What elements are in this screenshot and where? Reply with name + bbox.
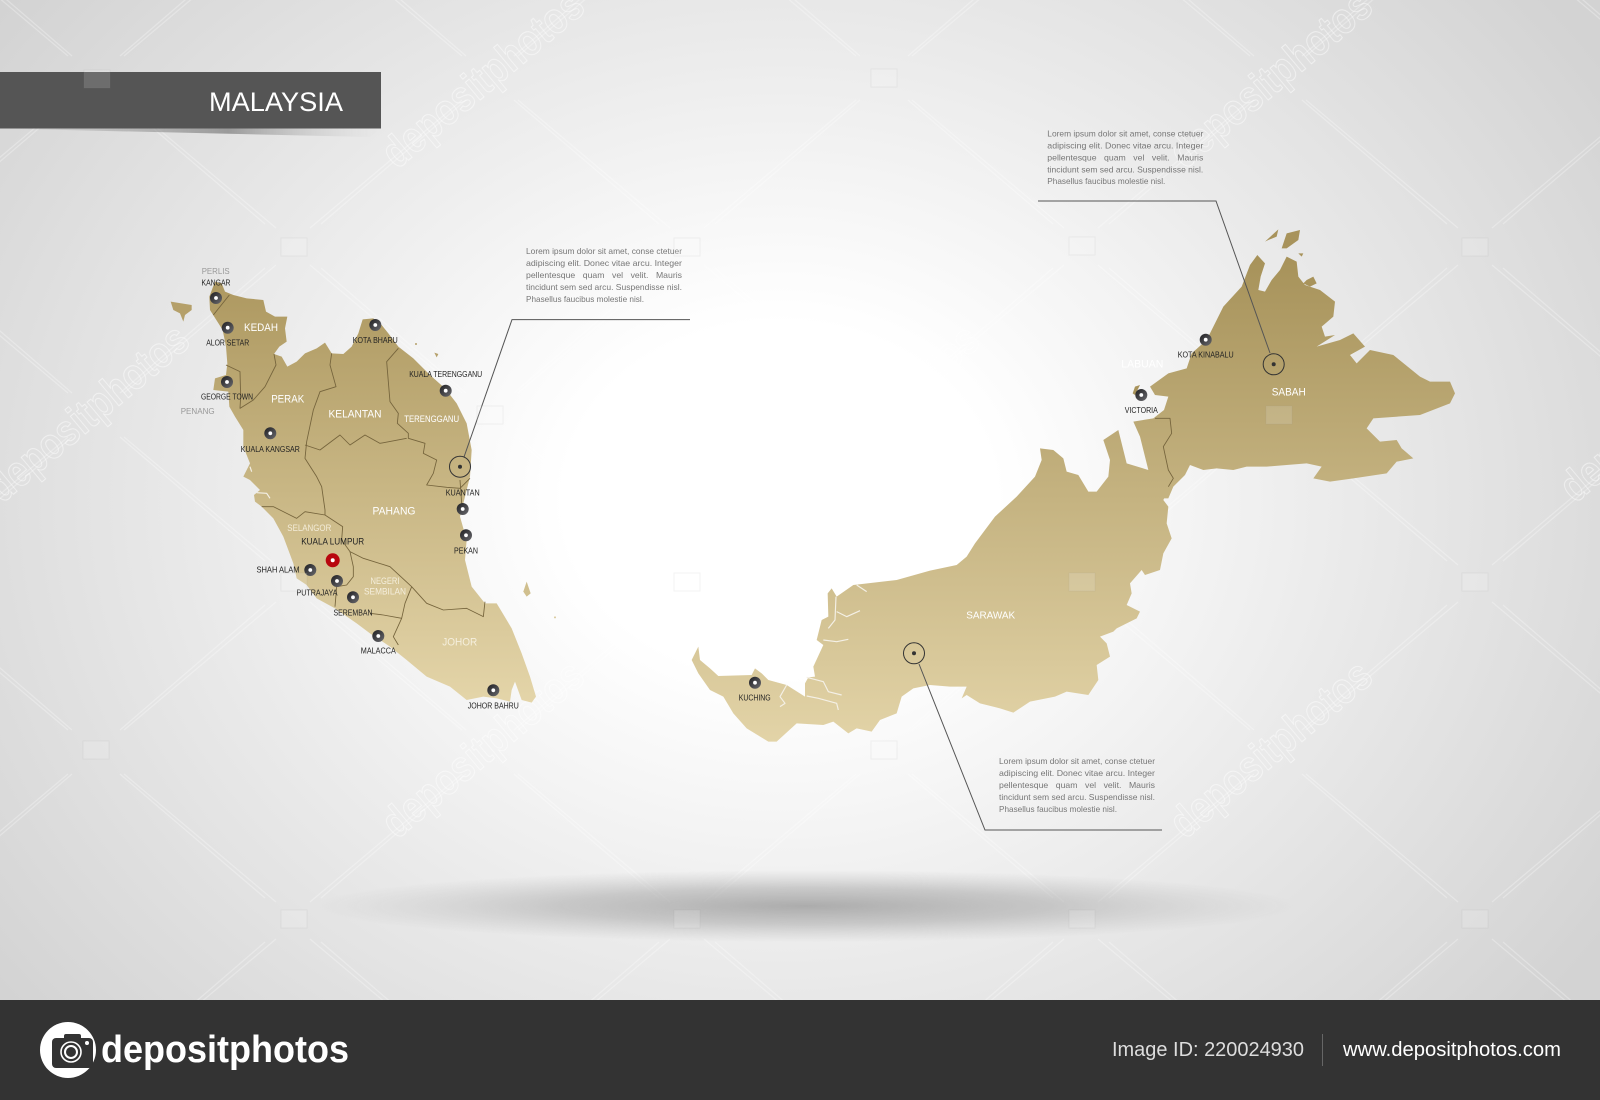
map: Sarawak (692, 430, 1173, 742)
callout: Sabah: pellentesque quam vel velit. Mauris (1047, 152, 1203, 162)
map: Sabah (1133, 229, 1455, 498)
state labels: peninsula: PERAK (271, 394, 305, 406)
islands (1133, 229, 1317, 395)
watermark camera marks (83, 69, 1488, 928)
callout: peninsula (450, 246, 690, 477)
city: Kuala Kangsar (241, 427, 300, 454)
city: Seremban (334, 591, 372, 617)
state labels: peninsula: KELANTAN (328, 408, 382, 420)
state labels: peninsula: NEGERI (370, 576, 400, 586)
image id: Image ID: 220024930 (1112, 1039, 1304, 1061)
state labels: peninsula: TERENGGANU (404, 414, 459, 425)
state labels: Borneo: LABUAN (1121, 358, 1163, 370)
callout: Sabah (1038, 129, 1284, 375)
city: Pekan: PEKAN (454, 545, 478, 555)
city: Alor Setar: ALOR SETAR (206, 338, 249, 348)
callout: Sabah: tincidunt sem sed arcu. Suspendisse nisl. (1047, 164, 1203, 174)
state labels: Borneo: SARAWAK (966, 610, 1015, 622)
state labels: peninsula: SEMBILAN (364, 587, 406, 597)
ground shadow (316, 870, 1296, 942)
callout: Sabah: Phasellus faucibus molestie nisl. (1047, 176, 1165, 186)
callout: peninsula: tincidunt sem sed arcu. Suspendisse nisl. (526, 282, 682, 292)
city: Putrajaya: PUTRAJAYA (296, 588, 338, 598)
city: Shah Alam: SHAH ALAM (256, 565, 300, 575)
callout: Sarawak: Phasellus faucibus molestie nisl. (999, 804, 1117, 814)
city: Kuantan (446, 488, 480, 515)
city: Kangar (202, 278, 230, 304)
callout: Sarawak: tincidunt sem sed arcu. Suspendisse nisl. (999, 792, 1155, 802)
map: Peninsular Malaysia (171, 282, 556, 703)
city: Kuching (739, 677, 771, 702)
callout: Sabah: Lorem ipsum dolor sit amet, conse ctetuer (1047, 129, 1203, 139)
city: Johor Bahru (468, 684, 519, 710)
city: Seremban: SEREMBAN (334, 607, 372, 617)
state labels: peninsula: SELANGOR (287, 523, 332, 533)
title banner (0, 72, 381, 137)
city: Alor Setar (206, 322, 249, 348)
city: Johor Bahru: JOHOR BAHRU (468, 700, 519, 710)
city: Kuching: KUCHING (739, 692, 771, 702)
Sabah border (1155, 418, 1173, 487)
callout: peninsula: Lorem ipsum dolor sit amet, conse ctetuer (526, 246, 682, 256)
callout: Sarawak: Lorem ipsum dolor sit amet, conse ctetuer (999, 756, 1155, 766)
icon: camera logo (40, 1022, 96, 1078)
state labels: Borneo: SABAH (1272, 387, 1306, 399)
watermarks: depositphotos (767, 314, 988, 511)
city: Kuala Kangsar: KUALA KANGSAR (241, 444, 300, 454)
state labels: peninsula (181, 266, 477, 648)
city: Kota Bharu: KOTA BHARU (353, 335, 398, 345)
city: Kangar: KANGAR (202, 278, 230, 288)
watermarks: depositphotos (372, 650, 593, 847)
city: Kuantan: KUANTAN (446, 488, 480, 498)
city: Victoria: VICTORIA (1125, 405, 1158, 415)
state labels: peninsula: PAHANG (372, 505, 416, 517)
callout: Sarawak: adipiscing elit. Donec vitae arcu. Integer (999, 768, 1155, 778)
islands (171, 302, 556, 618)
callout: Sarawak: pellentesque quam vel velit. Mauris (999, 780, 1155, 790)
city: Kuala Terengganu: KUALA TERENGGANU (409, 369, 482, 379)
state labels: Borneo (966, 358, 1306, 622)
city: Putrajaya (296, 575, 343, 598)
city: George Town (201, 376, 253, 402)
capital: Kuala Lumpur (301, 536, 365, 567)
capital: Kuala Lumpur: KUALA LUMPUR (301, 536, 365, 546)
callout: peninsula: pellentesque quam vel velit. Mauris (526, 270, 682, 280)
peninsula landmass (209, 282, 536, 703)
footer bar (0, 1000, 1600, 1100)
state borders (213, 295, 485, 645)
watermarks (0, 0, 1600, 847)
state labels: peninsula: KEDAH (244, 322, 278, 334)
city: Kota Kinabalu (1178, 334, 1234, 360)
callout: Sabah: adipiscing elit. Donec vitae arcu. Integer (1047, 140, 1203, 150)
watermarks: depositphotos (1160, 650, 1381, 847)
city: Kota Kinabalu: KOTA KINABALU (1178, 350, 1234, 360)
callout: Sarawak (904, 643, 1162, 830)
city: Shah Alam (256, 564, 316, 576)
state labels: peninsula: PENANG (181, 406, 215, 416)
city: Malacca: MALACCA (361, 646, 396, 656)
city: Pekan (454, 529, 478, 555)
city: Kota Bharu (353, 319, 398, 345)
logo wordmark: depositphotos (101, 1029, 349, 1071)
state labels: peninsula: JOHOR (442, 636, 477, 648)
city: Kuala Terengganu (409, 369, 482, 397)
rivers (780, 585, 867, 710)
website: www.depositphotos.com (1342, 1039, 1561, 1061)
city: Malacca (361, 630, 396, 656)
city: Victoria (1125, 389, 1158, 415)
callout: peninsula: adipiscing elit. Donec vitae arcu. Integer (526, 258, 682, 268)
title banner: MALAYSIA (209, 87, 343, 117)
city: George Town: GEORGE TOWN (201, 392, 253, 402)
state labels: peninsula: PERLIS (202, 266, 230, 276)
callout: peninsula: Phasellus faucibus molestie nisl. (526, 294, 644, 304)
